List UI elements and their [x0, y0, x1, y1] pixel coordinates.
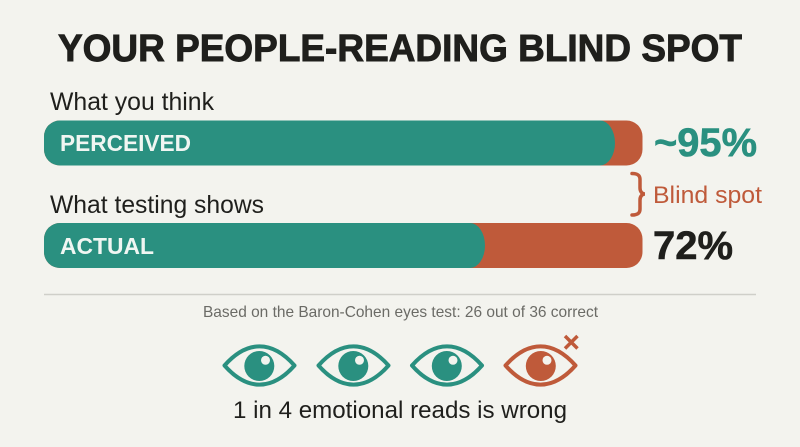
icon: correct eye 1	[224, 346, 294, 385]
label: blind spot: Blind spot	[653, 182, 762, 209]
value: perceived percent: ~95%	[654, 121, 757, 165]
caption: source: Based on the Baron-Cohen eyes test: 26 out of 36 correct	[203, 304, 599, 321]
statement: 1 in 4 wrong: 1 in 4 emotional reads is wrong	[233, 397, 567, 424]
actual bar: ACTUAL	[60, 233, 154, 259]
icon: wrong eye with x mark	[506, 336, 578, 385]
perceived bar	[44, 120, 642, 166]
value: actual percent: 72%	[653, 224, 733, 268]
title: YOUR PEOPLE-READING BLIND SPOT	[58, 28, 742, 70]
label: what you think: What you think	[50, 89, 215, 116]
icon: correct eye 2	[318, 346, 388, 385]
icon: correct eye 3	[412, 346, 482, 385]
label: what testing shows: What testing shows	[50, 192, 264, 219]
bracket: blind spot gap	[632, 174, 645, 215]
actual bar	[44, 223, 642, 268]
perceived bar: PERCEIVED	[60, 130, 191, 156]
